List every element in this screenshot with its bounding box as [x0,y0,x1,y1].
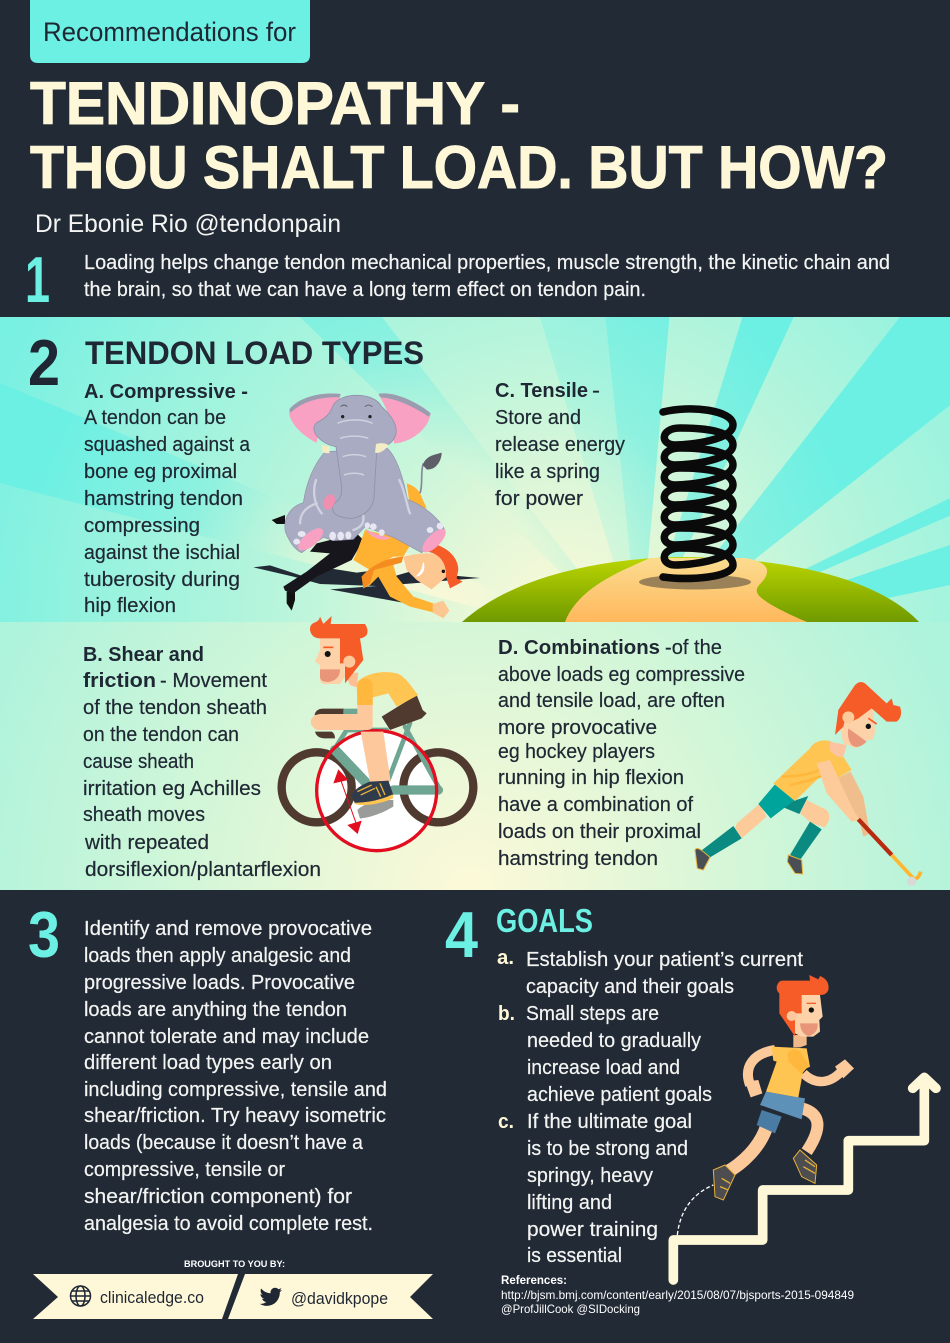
goal b: increase load and [527,1056,680,1079]
shoe [351,781,393,804]
text block: compressive: squashed against a [84,433,251,456]
text block: compressive [84,380,251,617]
text block: combinations [498,636,745,870]
elephant [285,393,449,556]
text block: provocative loads: shear/friction. Try heavy isometric [84,1104,386,1127]
heading: tendon load types: TENDON LOAD TYPES [85,335,424,371]
references [501,1273,854,1316]
goal c: springy, heavy [527,1164,654,1187]
text block: combinations: have a combination of [498,793,693,816]
text block: combinations: above loads eg compressive [498,663,745,686]
ribbon right: twitter: @davidkpope [291,1289,388,1308]
brought to you by label: BROUGHT TO YOU BY: [184,1259,285,1269]
header panel [25,0,890,316]
text block: provocative loads: analgesia to avoid complete rest. [84,1212,373,1235]
panel: goals [445,898,936,1280]
text block: compressive: A tendon can be [84,406,226,429]
title: THOU SHALT LOAD. BUT HOW? [30,134,888,201]
text block: combinations: eg hockey players [498,740,655,763]
text block: tensile: C. Tensile [495,379,588,402]
text block: combinations: -of the [665,636,722,659]
goal c: power training [527,1218,658,1241]
arm [311,705,373,730]
number 1: 1 [25,243,50,316]
illustration: hill with spring [462,409,919,622]
panel: tendon load types lower [0,616,950,890]
text block: provocative loads: shear/friction component) for [84,1185,352,1208]
title [30,70,888,201]
text block: provocative loads: loads are anything the tendon [84,998,347,1021]
text block: combinations: running in hip flexion [498,766,684,789]
author: Dr Ebonie Rio @tendonpain [35,210,341,238]
head [315,638,345,684]
man shadow [253,565,480,604]
goal a: a. [497,947,514,969]
dashed jump line [677,1185,713,1235]
goal c [498,1110,692,1267]
text block: compressive: compressing [84,514,200,537]
bike frame [335,723,438,790]
illustration: runner on stairs arrow [673,975,936,1280]
text block: combinations: and tensile load, are often [498,689,725,712]
text block: provocative loads: progressive loads. Provocative [84,971,355,994]
runner [713,975,854,1200]
spring [663,409,733,578]
illustration: man squashed by elephant [253,393,480,618]
goal b: b. [498,1003,515,1025]
panel: tendon load types upper [0,317,950,622]
text block: compressive: bone eg proximal [84,460,237,483]
subtitle tab [30,0,310,63]
goal a: Establish your patient’s current [526,948,803,971]
ghost shoe [357,800,393,819]
man [272,483,463,618]
ribbon left: website [33,1274,238,1319]
shirt [357,672,418,707]
intro text: Loading helps change tendon mechanical properties, muscle strength, the kinetic chain and [84,251,890,274]
bike wheels [282,752,473,822]
hair [310,616,368,683]
goal a: capacity and their goals [526,975,734,998]
text block: compressive: hip flexion [84,594,176,617]
text block: compressive: against the ischial [84,541,240,564]
text block: shear and friction: on the tendon can [83,723,239,746]
text block: shear and friction: sheath moves [83,803,205,826]
text block: shear and friction: cause sheath [83,750,194,773]
goal c: c. [498,1111,514,1133]
title: TENDINOPATHY - [30,70,520,137]
text block: tensile: Store and [495,406,581,429]
text block: tensile: like a spring [495,460,600,483]
number 2: 2 [28,326,60,399]
goal c: If the ultimate goal [527,1110,692,1133]
ribbon right: twitter [228,1274,433,1319]
text block: shear and friction: irritation eg Achilles [83,777,261,800]
text block: compressive: A. Compressive - [84,380,248,403]
text block: shear and friction: - Movement [160,669,267,692]
spring shadow [639,574,751,590]
text block: shear and friction: friction [83,669,156,692]
handlebars [314,709,344,738]
magnifier circle [317,731,437,851]
text block: compressive: tuberosity during [84,568,240,591]
text block: combinations: hamstring tendon [498,847,658,870]
text block: shear and friction [83,643,321,881]
leg [361,732,391,782]
text block: compressive: hamstring tendon [84,487,243,510]
text block: provocative loads: different load types early on [84,1051,332,1074]
text block: shear and friction: dorsiflexion/plantarflexion [85,858,321,881]
text block: combinations: loads on their proximal [498,820,701,843]
text block: shear and friction: of the tendon sheath [83,696,267,719]
subtitle tab: Recommendations for [43,17,296,47]
text block: shear and friction: with repeated [84,831,209,854]
icon: globe [70,1286,90,1306]
text block: tensile [495,379,626,510]
red arrows [338,773,357,827]
text block: provocative loads: loads then apply analgesic and [84,944,351,967]
goal b: needed to gradually [527,1029,702,1052]
illustration: cyclist [282,616,473,851]
illustration: hockey player [695,682,921,886]
text block: provocative loads: Identify and remove provocative [84,917,372,940]
goal c: is essential [527,1244,622,1267]
references: http://bjsm.bmj.com/content/early/2015/08/07/bjsports-2015-094849 [501,1288,854,1302]
panel: section 3 text [28,898,387,1235]
ribbon left: website: clinicaledge.co [100,1288,204,1307]
number 4: 4 [445,898,478,971]
hill [462,557,919,622]
heading: goals: GOALS [496,902,593,939]
text block: tensile: for power [495,487,583,510]
neck [345,673,358,687]
icon: twitter bird [260,1288,282,1306]
text block: shear and friction: B. Shear and [83,643,204,666]
text block: provocative loads: compressive, tensile or [84,1158,285,1181]
references: References: [501,1273,567,1287]
text block: tensile: - [592,379,600,402]
goal b: Small steps are [526,1002,659,1025]
text block: combinations: D. Combinations [498,636,660,659]
text block: tensile: release energy [495,433,626,456]
goal c: is to be strong and [527,1137,688,1160]
goal c: lifting and [527,1191,612,1214]
text block: provocative loads: loads (because it doesn’t have a [84,1131,364,1154]
goal b [498,1002,712,1106]
stairs arrow [673,1077,936,1280]
text block: provocative loads: including compressive, tensile and [84,1078,387,1101]
text block: combinations: more provocative [498,716,657,739]
text block: provocative loads [84,917,387,1235]
references: @ProfJillCook @SIDocking [501,1302,640,1316]
credit ribbon [33,1259,433,1319]
intro text [84,251,890,301]
shorts [382,695,427,730]
path [565,558,807,622]
text block: provocative loads: cannot tolerate and may include [84,1025,369,1048]
goal a [497,947,803,998]
intro text: the brain, so that we can have a long term effect on tendon pain. [84,278,646,301]
number 3: 3 [28,898,60,971]
goal b: achieve patient goals [527,1083,712,1106]
